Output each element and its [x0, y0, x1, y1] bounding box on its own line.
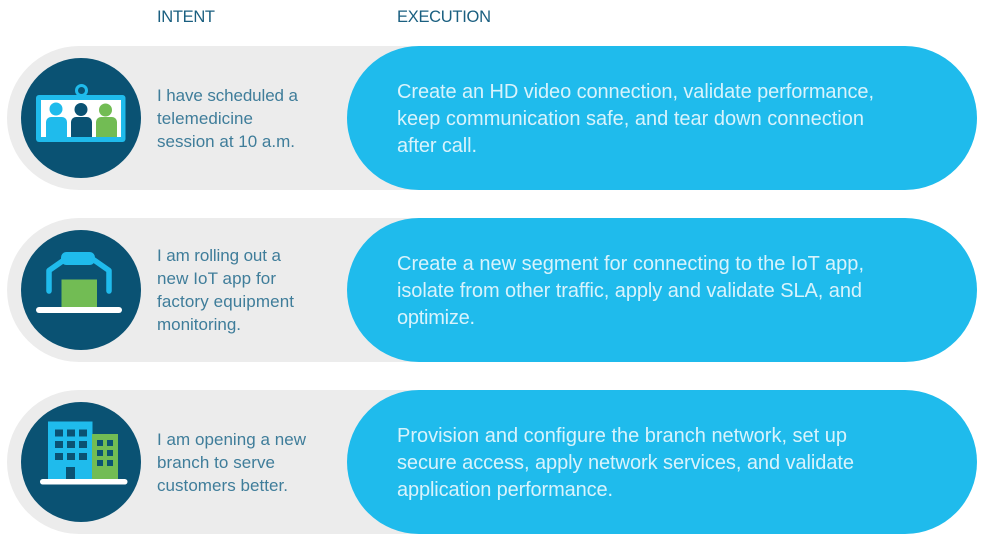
intent text: I am opening a new — [157, 430, 307, 449]
intent text: customers better. — [157, 476, 288, 495]
intent text: monitoring. — [157, 315, 241, 334]
panel: IoT row — [7, 218, 977, 362]
execution text: isolate from other traffic, apply and validate SLA, and — [397, 280, 862, 302]
intent pill background — [7, 390, 430, 534]
intent text: factory equipment — [157, 292, 294, 311]
heading: intent: INTENT — [157, 8, 215, 26]
intent text: I am rolling out a — [157, 246, 282, 265]
execution text: Create an HD video connection, validate performance, — [397, 81, 874, 103]
execution pill — [347, 46, 977, 190]
heading: execution: EXECUTION — [397, 8, 491, 26]
icon: video call — [21, 58, 141, 178]
execution text: application performance. — [397, 479, 613, 501]
intent pill background — [7, 218, 430, 362]
icon: office buildings — [21, 402, 141, 522]
intent text — [157, 430, 307, 495]
intent text — [157, 86, 299, 151]
intent text: session at 10 a.m. — [157, 132, 295, 151]
panel: telemedicine row — [7, 46, 977, 190]
execution text: after call. — [397, 135, 477, 157]
icon: factory robot arm — [21, 230, 141, 350]
intent text — [157, 246, 294, 334]
execution text — [397, 253, 864, 329]
execution pill — [347, 390, 977, 534]
execution text: keep communication safe, and tear down connection — [397, 108, 864, 130]
execution pill — [347, 218, 977, 362]
execution text: secure access, apply network services, and validate — [397, 452, 854, 474]
panel: branch row — [7, 390, 977, 534]
intent text: new IoT app for — [157, 269, 276, 288]
execution text — [397, 425, 854, 501]
intent text: branch to serve — [157, 453, 275, 472]
intent text: I have scheduled a — [157, 86, 299, 105]
execution text: optimize. — [397, 307, 475, 329]
execution text — [397, 81, 874, 157]
intent text: telemedicine — [157, 109, 253, 128]
intent pill background — [7, 46, 430, 190]
execution text: Create a new segment for connecting to the IoT app, — [397, 253, 864, 275]
execution text: Provision and configure the branch network, set up — [397, 425, 847, 447]
